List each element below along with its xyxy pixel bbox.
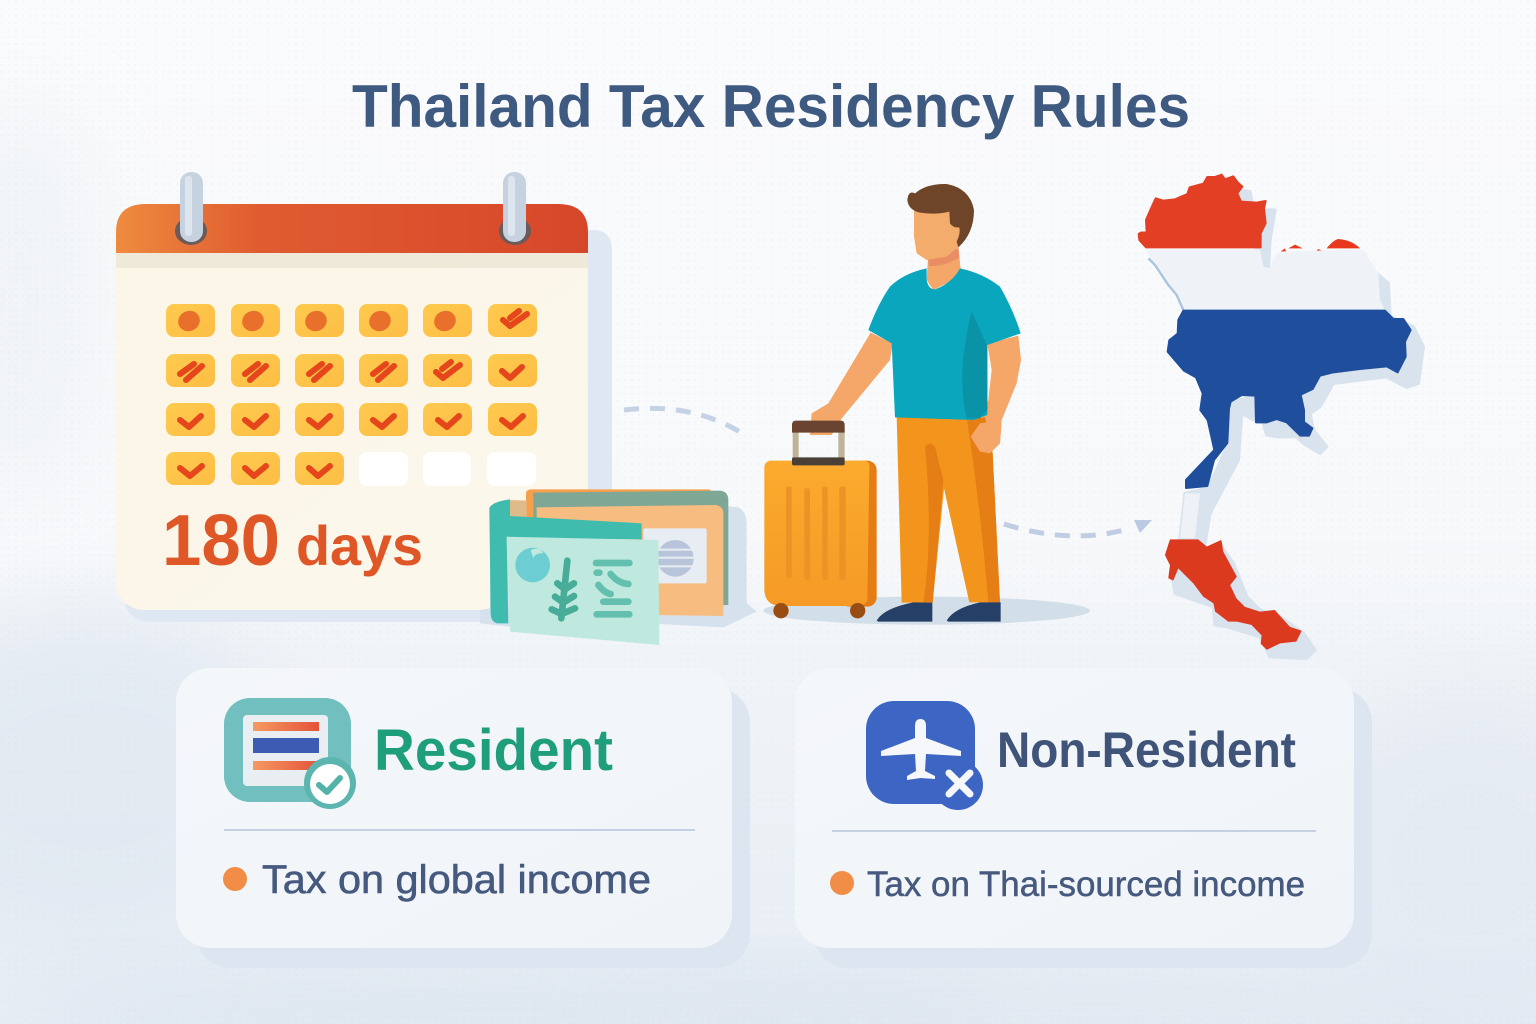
traveller with suitcase [763,184,1090,625]
wallet and passport [480,489,757,645]
non-resident heading: Non-Resident [997,722,1296,778]
blue band [1168,311,1411,488]
resident heading: Resident [374,718,613,783]
suitcase handle [792,421,845,433]
day cells grid [166,304,537,486]
panel: calendar [116,172,612,622]
white band [1145,249,1385,310]
bullet: thai-sourced income: Tax on Thai-sourced income [867,865,1305,904]
180 days label: 180 [162,501,280,581]
icon: plane with cross [866,701,983,810]
dashed arrow: calendar to traveller [624,408,740,432]
left arm and hand [810,333,893,435]
dashed arrow: traveller to map [1004,520,1152,536]
panel: non-resident [795,668,1372,968]
panel: resident [176,668,750,968]
head [907,184,974,260]
ground shadow [763,597,1090,625]
hand on hip [971,420,1002,453]
shirt [868,268,1021,420]
title: Thailand Tax Residency Rules [352,73,1190,140]
map drop shadow [1172,190,1423,658]
calendar header band [116,204,588,253]
south white band [1180,493,1200,538]
shoes [877,602,1001,622]
bullet: global income: Tax on global income [262,858,651,902]
river line on white band [1148,258,1183,310]
map of Thailand in flag colours [1139,175,1423,658]
icon: thai flag card with check [224,698,356,809]
calendar ring left [175,172,207,245]
180 days label: days [296,514,423,577]
suitcase [764,430,877,618]
north red band [1139,175,1266,247]
trousers [897,417,1000,603]
north-east red slivers [1281,239,1360,252]
right arm and hand [971,336,1021,453]
south red band [1166,540,1300,649]
neck [927,245,961,290]
calendar ring right [499,172,531,245]
